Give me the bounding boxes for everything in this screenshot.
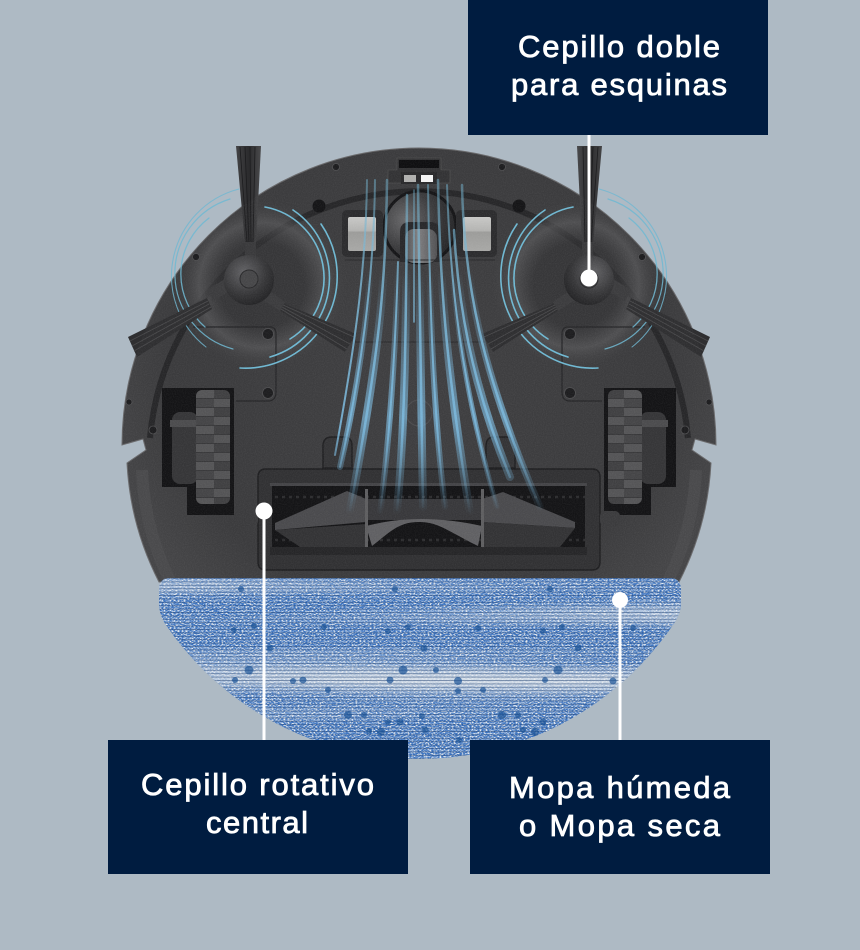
dividers xyxy=(365,489,368,547)
wheel hub xyxy=(172,412,198,484)
cover plate outline xyxy=(193,327,276,401)
label: corner brush: para esquinas xyxy=(511,67,727,102)
rubber blades xyxy=(275,491,366,530)
callout line: mop xyxy=(612,592,628,740)
wheel axle xyxy=(170,420,198,427)
airflow streams, wider lower part xyxy=(340,180,540,513)
bristle strands up xyxy=(240,147,255,243)
body grain texture xyxy=(120,148,720,584)
bristles up xyxy=(236,146,261,243)
bristles left xyxy=(128,298,212,357)
side brush recess xyxy=(177,200,347,370)
label: central brush: central xyxy=(206,805,308,840)
mop weave lines xyxy=(155,576,685,762)
bristle strands right xyxy=(281,305,354,349)
label: mop: o Mopa seca xyxy=(519,808,721,843)
right half of robot, mirrored xyxy=(482,146,712,515)
right latch xyxy=(600,511,620,526)
screws xyxy=(126,164,340,434)
label: corner brush: Cepillo doble xyxy=(518,29,720,64)
wheel well xyxy=(162,388,234,515)
castor wheel xyxy=(384,191,456,263)
water drops xyxy=(231,586,636,743)
left half of robot: side brush housing, wheel, screws xyxy=(126,146,356,515)
robot vacuum underside xyxy=(120,146,720,585)
brush opening xyxy=(272,485,585,547)
mop fibre noise xyxy=(155,576,685,762)
callout line: corner brush xyxy=(580,135,598,286)
bristles right xyxy=(279,303,356,352)
mop light bands xyxy=(159,578,681,721)
central panel lines xyxy=(345,260,495,426)
housing frame xyxy=(258,469,600,570)
left latch xyxy=(238,511,258,526)
label: corner brush xyxy=(468,0,768,135)
callout line: central brush xyxy=(256,502,272,740)
central brush housing xyxy=(238,469,620,570)
label: central brush: Cepillo rotativo xyxy=(141,767,374,802)
mop base xyxy=(155,576,685,762)
wet mop pad xyxy=(155,576,685,762)
airflow streams xyxy=(335,180,540,513)
holders xyxy=(245,242,256,262)
bristle strands left xyxy=(130,301,211,351)
robot body shell xyxy=(122,148,716,582)
lower edge band xyxy=(142,470,696,488)
cliff sensor left xyxy=(342,210,383,257)
top sensor bay xyxy=(388,158,450,184)
wheel tread xyxy=(196,390,230,504)
label: mop xyxy=(470,740,770,874)
label: central brush xyxy=(108,740,408,874)
hub xyxy=(224,255,274,305)
side brush xyxy=(128,146,356,357)
label: mop: Mopa húmeda xyxy=(509,770,731,805)
bristles xyxy=(275,497,585,540)
rim groove xyxy=(150,191,688,438)
cliff sensor right xyxy=(456,210,497,257)
mount hole xyxy=(312,200,326,212)
blue motion arcs xyxy=(171,189,337,368)
brush clip xyxy=(323,437,352,468)
